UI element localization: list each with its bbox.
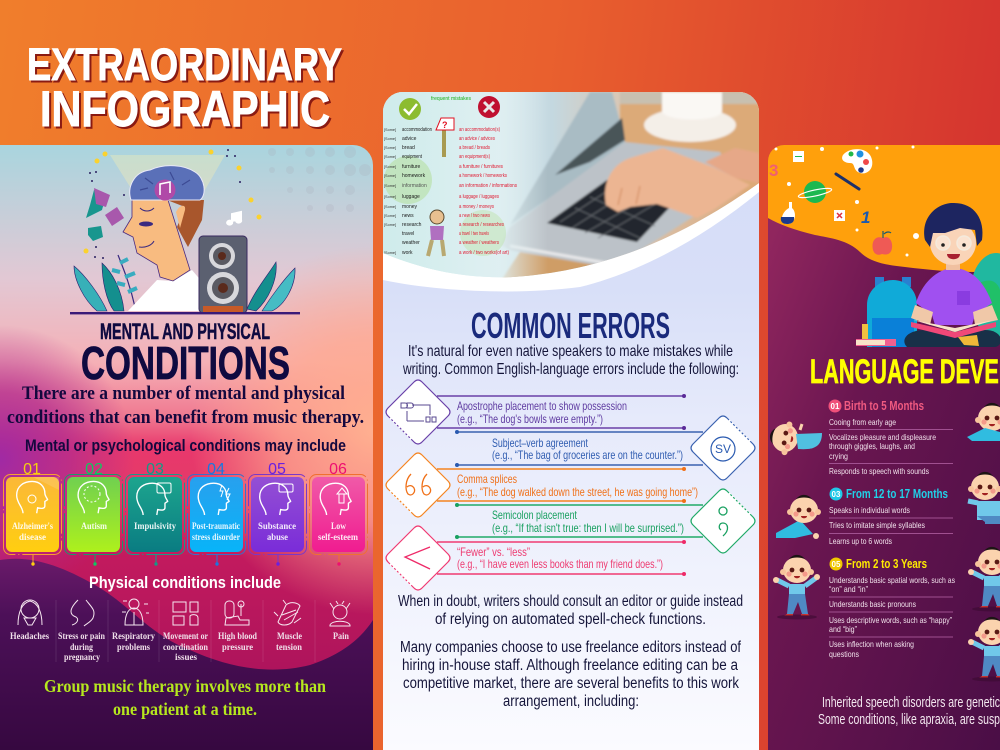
milestone: 2 to 3 years: Uses descriptive words, such as “happy” <box>829 615 952 625</box>
card 04 <box>188 461 246 566</box>
baby standing <box>773 555 820 620</box>
labels: physical conditions: during <box>70 642 93 652</box>
closing statement: one patient at a time. <box>113 699 257 719</box>
milestone: 12 to 17 months: 03 <box>832 490 841 499</box>
icon: apple <box>872 231 892 255</box>
word list: some markers: [Some] <box>384 214 396 218</box>
title: EXTRAORDINARY <box>27 39 342 90</box>
card 01: Alzheimer's <box>12 522 53 532</box>
icon: numerals: 3 <box>769 161 778 180</box>
card 06 <box>310 461 368 566</box>
labels: physical conditions: Movement or <box>163 631 208 641</box>
body text: Many companies choose to use freelance editors instead of <box>400 639 742 656</box>
word list: some markers: [Some] <box>384 223 396 227</box>
word list: bread <box>402 145 415 151</box>
closing statement: Group music therapy involves more than <box>44 676 326 696</box>
icon: movement or coordination issues <box>173 602 198 625</box>
error: comma splices: Comma splices <box>457 472 517 486</box>
icon: flask <box>781 202 795 224</box>
word list: errors: an accommodation(s) <box>459 127 500 133</box>
icon: cross <box>478 96 500 118</box>
word list: errors: an equipment(s) <box>459 154 490 160</box>
milestone: birth to 5 months: Responds to speech with sounds <box>829 466 929 476</box>
word list: some markers: [Some] <box>384 165 396 169</box>
illustration: boy reading <box>856 203 1000 347</box>
icon: high blood pressure <box>225 601 249 625</box>
word list: work <box>402 250 413 256</box>
card 06: Low <box>331 522 346 532</box>
word list: errors: a bread / breads <box>459 145 490 151</box>
card 03: Impulsivity <box>134 522 176 532</box>
milestone: 2 to 3 years: questions <box>829 649 859 659</box>
word list: some markers: [Some] <box>384 251 396 255</box>
icon: check <box>399 98 421 120</box>
milestone: 12 to 17 months: Tries to imitate simple syllables <box>829 520 925 530</box>
baby waving right <box>968 617 1000 682</box>
illustration: head with brain and speaker <box>70 149 300 314</box>
cards: mental conditions <box>4 461 368 566</box>
body text: competitive market, there are several benefits to this work <box>403 675 739 692</box>
word list: equipment <box>402 154 423 160</box>
heading: CONDITIONS <box>81 337 290 389</box>
milestone: 2 to 3 years <box>829 557 955 659</box>
card 01: disease <box>19 533 46 543</box>
icon: muscle tension <box>274 600 301 625</box>
error: semicolon <box>455 489 755 553</box>
body text: of relying on automated spell-check functions. <box>435 611 706 628</box>
icon: numerals <box>769 161 870 227</box>
intro text: It's natural for even native speakers to make mistakes while <box>408 343 733 360</box>
milestone: birth to 5 months: 01 <box>831 402 840 411</box>
body text: hiring in-house staff. Although freelance editing can be a <box>402 657 738 674</box>
baby standing right <box>968 547 1000 612</box>
milestone: birth to 5 months: Birth to 5 Months <box>844 399 924 413</box>
labels: physical conditions: coordination <box>163 642 208 652</box>
labels: physical conditions: pressure <box>222 642 253 652</box>
word list: errors: a new / two news <box>459 213 490 219</box>
word list: furniture <box>402 164 421 170</box>
word list: information <box>402 183 427 189</box>
milestone: 12 to 17 months <box>829 487 953 546</box>
word list: money <box>402 204 418 210</box>
labels: physical conditions: Headaches <box>10 631 49 641</box>
word list: errors: a work / two works(of art) <box>459 250 509 256</box>
word list: some markers: [Some] <box>384 195 396 199</box>
word list: errors: a homework / homeworks <box>459 173 507 179</box>
word list: news <box>402 213 414 219</box>
icon: question sign: ? <box>442 120 448 130</box>
icon: pain <box>330 601 350 626</box>
milestone: birth to 5 months: Vocalizes pleasure and displeasure <box>829 432 936 442</box>
labels: physical conditions: Stress or pain <box>58 631 105 641</box>
icon: question sign <box>436 118 454 157</box>
milestone: 12 to 17 months: Learns up to 6 words <box>829 536 892 546</box>
card 01: 01 <box>23 461 41 478</box>
icon: math tiles <box>793 151 845 221</box>
baby lying <box>767 419 822 457</box>
card 04: 04 <box>207 461 225 478</box>
milestone: 2 to 3 years: Understands basic spatial words, such as <box>829 575 955 585</box>
milestone: 2 to 3 years: Understands basic pronouns <box>829 599 916 609</box>
baby lying right <box>967 403 1000 441</box>
word list: accommodation <box>402 127 432 133</box>
heading <box>82 323 289 380</box>
baby crawling <box>776 495 821 539</box>
labels: physical conditions: problems <box>117 642 150 652</box>
error: fewer vs less: (e.g., “I have even less books than my friend does.”) <box>457 557 663 571</box>
closing statement <box>44 676 326 719</box>
card 05: Substance <box>258 522 296 532</box>
error: comma splices: (e.g., “The dog walked down the street, he was going home”) <box>457 485 698 499</box>
title <box>27 39 342 137</box>
error: comma splices <box>386 453 698 517</box>
error: apostrophe: Apostrophe placement to show possession <box>457 399 627 413</box>
word list: weather <box>402 240 420 246</box>
intro text: writing. Common English-language errors include the following: <box>402 361 739 378</box>
error: apostrophe: (e.g., “The dog's bowls were empty.”) <box>457 412 603 426</box>
labels: physical conditions: High blood <box>218 631 257 641</box>
word list: errors: a weather / weathers <box>459 240 499 246</box>
icon: numerals: 1 <box>861 208 870 227</box>
intro text: There are a number of mental and physical <box>22 384 345 404</box>
word list: homework <box>402 173 426 179</box>
icon: planet <box>798 181 832 203</box>
milestones <box>828 399 955 659</box>
error: semicolon: Semicolon placement <box>492 508 577 522</box>
error list <box>386 380 755 590</box>
labels: physical conditions: Muscle <box>277 631 302 641</box>
word list: luggage <box>402 194 420 200</box>
labels: physical conditions: Respiratory <box>112 631 155 641</box>
illustration: school icons <box>769 146 919 256</box>
word list: errors <box>459 127 517 256</box>
icon: respiratory problems <box>122 599 149 625</box>
milestone: 2 to 3 years: 05 <box>832 560 841 569</box>
heading: COMMON ERRORS <box>471 305 670 346</box>
photo: laptop and word list <box>383 92 760 292</box>
heading: MENTAL AND PHYSICAL <box>100 319 270 344</box>
card 01 <box>4 461 62 566</box>
subheading: mental conditions: Mental or psychological conditions may include <box>25 436 346 455</box>
error: subject-verb: Subject–verb agreement <box>492 436 588 450</box>
icon: headaches <box>18 600 42 625</box>
word list: errors: an information / informations <box>459 183 517 189</box>
word list: errors: an advice / advices <box>459 136 495 142</box>
card 06: self-esteem <box>318 533 358 543</box>
baby illustrations <box>767 403 1000 682</box>
word list: some markers: [Some] <box>384 174 396 178</box>
word list: errors: a money / moneys <box>459 204 494 210</box>
intro text <box>402 343 739 378</box>
panel: language development <box>767 145 1000 750</box>
word list: some markers: [Some] <box>384 128 396 132</box>
labels: physical conditions <box>10 631 349 662</box>
labels: physical conditions: tension <box>276 642 302 652</box>
card 03: 03 <box>146 461 164 478</box>
baby sitting right <box>968 472 1000 524</box>
word list: some markers: [Some] <box>384 205 396 209</box>
labels: physical conditions: issues <box>175 652 197 662</box>
error: fewer vs less: “Fewer” vs. “less” <box>457 545 530 559</box>
milestone: birth to 5 months: crying <box>829 451 848 461</box>
word list: research <box>402 222 422 228</box>
body text <box>398 593 743 710</box>
error: subject-verb <box>455 416 755 480</box>
icon: brush <box>836 174 859 189</box>
icon: stress or pain during pregnancy <box>71 600 94 626</box>
milestone: 2 to 3 years: From 2 to 3 Years <box>846 557 927 571</box>
milestone: 2 to 3 years: “on” and “in” <box>829 584 868 594</box>
error: subject-verb: (e.g., “The bag of groceries are on the counter.”) <box>492 448 683 462</box>
intro text: conditions that can benefit from music therapy. <box>7 408 364 428</box>
heading: word list: frequent mistakes <box>431 96 472 102</box>
subheading: physical conditions: Physical conditions include <box>89 573 281 592</box>
intro text <box>7 384 364 428</box>
card 04: stress disorder <box>192 532 240 542</box>
card 03 <box>126 461 184 566</box>
word list: some markers: [Some] <box>384 146 396 150</box>
error: apostrophe <box>386 380 686 444</box>
panel: common errors <box>383 92 760 750</box>
card 06: 06 <box>329 461 347 478</box>
word list: errors: a travel / two travels <box>459 231 489 237</box>
icon: palette <box>842 149 872 173</box>
icon: thinking man <box>428 210 444 256</box>
card 02: 02 <box>85 461 103 478</box>
word list: some markers: [Some] <box>384 137 396 141</box>
card 04: Post-traumatic <box>192 521 240 531</box>
word list <box>402 127 432 256</box>
card 05 <box>248 461 306 566</box>
error: subject-verb: SV <box>715 442 731 456</box>
labels: physical conditions: pregnancy <box>64 652 100 662</box>
milestone: 12 to 17 months: From 12 to 17 Months <box>846 487 948 501</box>
word list: some markers <box>384 128 396 255</box>
card 05: 05 <box>268 461 286 478</box>
milestone: 2 to 3 years: Uses inflection when asking <box>829 639 914 649</box>
error: semicolon: (e.g., “If that isn't true: then I will be surprised.”) <box>492 521 684 535</box>
panel: mental and physical conditions <box>0 145 373 750</box>
error: fewer vs less <box>386 526 686 590</box>
body text: arrangement, including: <box>503 693 639 710</box>
word list: errors: a luggage / luggages <box>459 194 499 200</box>
closing statement <box>818 694 1000 728</box>
card 02 <box>64 461 122 566</box>
word list: errors: a research / researches <box>459 222 504 228</box>
card 02: Autism <box>81 522 107 532</box>
labels: physical conditions: Pain <box>333 631 349 641</box>
milestone: birth to 5 months <box>828 399 953 476</box>
word list: travel <box>402 231 414 237</box>
physical conditions icons <box>18 599 350 662</box>
body text: When in doubt, writers should consult an editor or guide instead <box>398 593 743 610</box>
word list: some markers: [Some] <box>384 155 396 159</box>
milestone: 12 to 17 months: Speaks in individual words <box>829 505 910 515</box>
word list: advice <box>402 136 417 142</box>
milestone: birth to 5 months: through giggles, laughs, and <box>829 441 915 451</box>
word list: errors: a furniture / furnitures <box>459 164 503 170</box>
word list: some markers: [Some] <box>384 184 396 188</box>
milestone: 2 to 3 years: and “big” <box>829 624 857 634</box>
card 05: abuse <box>267 533 288 543</box>
title: INFOGRAPHIC <box>40 81 330 137</box>
milestone: birth to 5 months: Cooing from early age <box>829 417 896 427</box>
